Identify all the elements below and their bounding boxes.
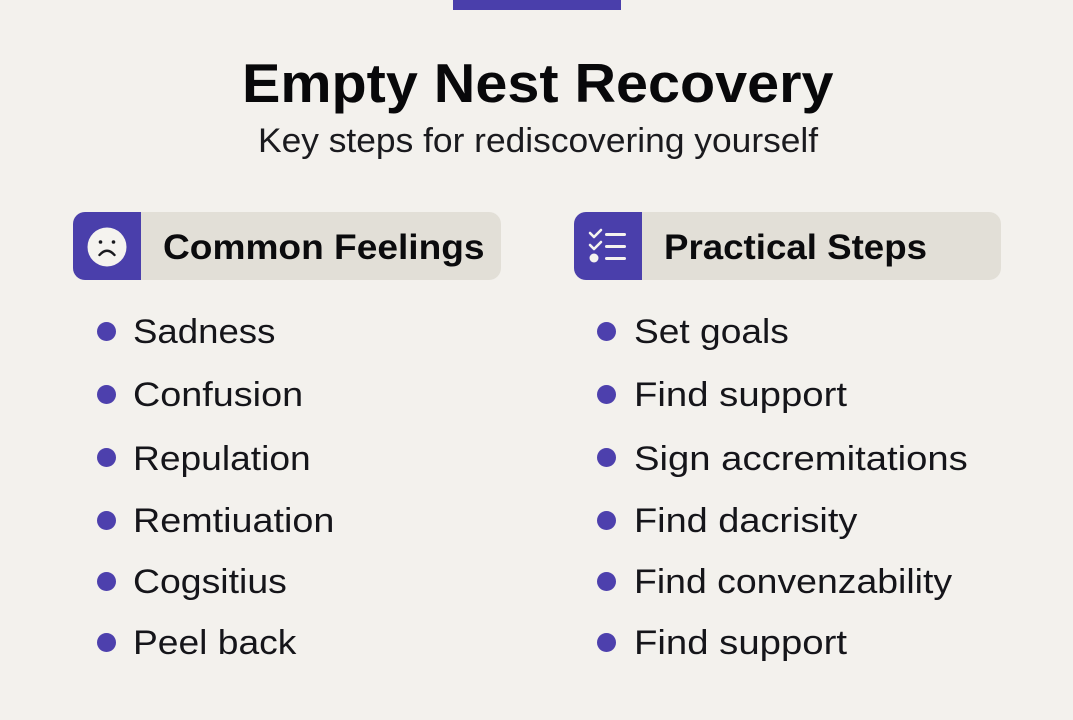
bullet 6 bbox=[97, 633, 116, 652]
heading: common feelings: Common Feelings bbox=[163, 228, 485, 267]
item: Confusion: Confusion bbox=[133, 376, 303, 414]
item: Find support: Find support bbox=[634, 624, 847, 662]
heading: practical steps: Practical Steps bbox=[664, 228, 927, 267]
item: Set goals: Set goals bbox=[634, 313, 789, 351]
item: Find dacrisity: Find dacrisity bbox=[634, 502, 857, 540]
subtitle: Key steps for rediscovering yourself bbox=[258, 122, 818, 160]
list: common feelings bbox=[97, 313, 334, 662]
header: practical steps bbox=[574, 212, 1001, 280]
header: common feelings bbox=[73, 212, 501, 280]
item: Peel back: Peel back bbox=[133, 624, 296, 662]
item: Find support: Find support bbox=[634, 376, 847, 414]
bullet 4 bbox=[597, 511, 616, 530]
bullet 2 bbox=[97, 385, 116, 404]
panel: practical steps bbox=[574, 212, 1001, 662]
bullet 3 bbox=[597, 448, 616, 467]
bullet 5 bbox=[97, 572, 116, 591]
item: Find convenzability: Find convenzability bbox=[634, 563, 952, 601]
bullet 1 bbox=[597, 322, 616, 341]
top accent bar bbox=[453, 0, 621, 10]
bullet 5 bbox=[597, 572, 616, 591]
item: Cogsitius: Cogsitius bbox=[133, 563, 287, 601]
bullet 6 bbox=[597, 633, 616, 652]
bullet 1 bbox=[97, 322, 116, 341]
list: practical steps bbox=[597, 313, 968, 662]
item: Repulation: Repulation bbox=[133, 440, 311, 478]
icon: sad face bbox=[73, 212, 141, 280]
bullet 4 bbox=[97, 511, 116, 530]
icon: checklist bbox=[574, 212, 642, 280]
panel: common feelings bbox=[73, 212, 501, 662]
bullet 3 bbox=[97, 448, 116, 467]
item: Sadness: Sadness bbox=[133, 313, 275, 351]
item: Sign accremitations: Sign accremitations bbox=[634, 440, 968, 478]
item: Remtiuation: Remtiuation bbox=[133, 502, 334, 540]
title: Empty Nest Recovery bbox=[242, 52, 834, 114]
bullet 2 bbox=[597, 385, 616, 404]
